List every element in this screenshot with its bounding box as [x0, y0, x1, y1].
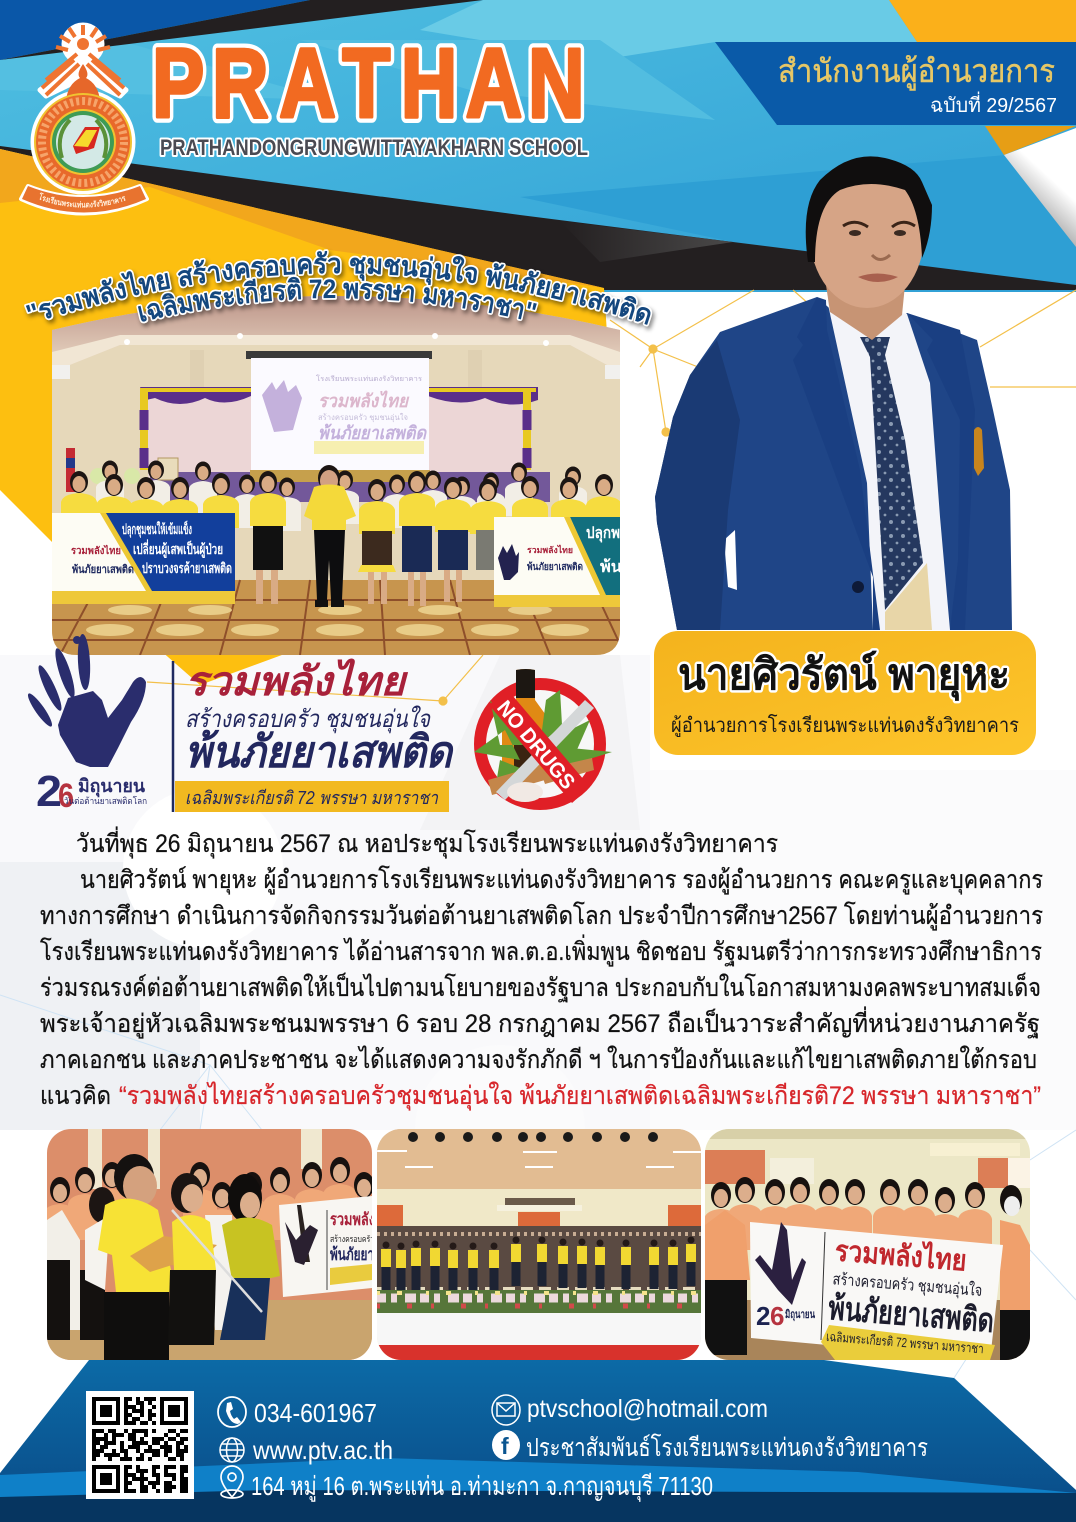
banner: รวมพลัง [330, 1210, 375, 1229]
facebook page: ประชาสัมพันธ์โรงเรียนพระแท่นดงรังวิทยาคาร [526, 1433, 928, 1462]
woman in yellow [168, 1173, 216, 1345]
banner: สร้างครอบครัว [330, 1234, 374, 1244]
school logo emblem [18, 22, 150, 216]
no drugs icon [474, 669, 612, 804]
curved headline: "รวมพลังไทย สร้างครอบครัว ชุมชนอุ่นใจ พ้นภัยยาเสพติด [24, 249, 657, 332]
photo: students with banner [704, 1129, 1030, 1360]
microphone stand [172, 1210, 262, 1312]
face features [843, 222, 915, 282]
speaker [98, 1154, 171, 1360]
front line in yellow [381, 1236, 696, 1292]
left banner: พ้นภัยยาเสพติด [72, 563, 134, 576]
campaign title: เฉลิมพระเกียรติ 72 พรรษา มหาราชา [185, 788, 439, 808]
prohibition band [489, 689, 590, 803]
phone number: 034-601967 [254, 1398, 377, 1428]
campaign title: สร้างครอบครัว ชุมชนอุ่นใจ [185, 705, 431, 734]
main event photo [52, 290, 625, 655]
lapels [793, 297, 880, 630]
issue number: ฉบับที่ 29/2567 [930, 91, 1057, 117]
folder [130, 1236, 217, 1272]
campaign hand icon: มิถุนายน [78, 776, 146, 798]
right banner: พ้น [600, 558, 622, 576]
campaign title [175, 658, 454, 812]
address: 164 หมู่ 16 ต.พระแท่น อ.ท่ามะกา จ.กาญจนบุรี 71130 [251, 1471, 713, 1502]
article body text: แนวคิด [40, 1082, 111, 1110]
students [705, 1177, 992, 1250]
principal name: นายศิวรัตน์ พายุหะ [678, 650, 1010, 702]
stage draping [150, 472, 550, 502]
bottle [502, 669, 548, 775]
sun fan [42, 25, 124, 95]
curtains [148, 393, 251, 480]
QR code [86, 1391, 194, 1499]
curved headline: เฉลิมพระเกียรติ 72 พรรษา มหาราชา" [136, 275, 543, 329]
ceiling [52, 296, 620, 352]
campaign hand icon [25, 634, 147, 816]
icon: globe [220, 1438, 244, 1462]
banner: สร้างครอบครัว ชุมชนอุ่นใจ [832, 1269, 983, 1301]
icon: email [492, 1395, 520, 1425]
flame [66, 64, 100, 100]
neck [826, 285, 905, 340]
icon: phone [218, 1397, 246, 1427]
main event photo: รวมพลังไทย [318, 390, 409, 411]
email address: ptvschool@hotmail.com [527, 1395, 768, 1423]
centre man [304, 465, 356, 607]
left banner: เปลี่ยนผู้เสพเป็นผู้ป่วย [133, 539, 223, 558]
main event photo: พ้นภัยยาเสพติด [318, 423, 427, 443]
photo: speaker reading statement [43, 1129, 381, 1360]
right banner: รวมพลังไทย [527, 544, 573, 555]
leaves [474, 690, 612, 790]
no drugs icon: NO DRUGS [492, 696, 579, 794]
icon: map pin [221, 1466, 243, 1498]
left banner: ปราบวงจรค้ายาเสพติด [142, 560, 232, 576]
projector screen [246, 351, 432, 359]
banner: มิถุนายน [785, 1308, 815, 1322]
school logo emblem: โรงเรียนพระแท่นดงรังวิทยาคาร [40, 192, 126, 208]
right banner: ปลุกพ [586, 525, 620, 543]
banner: พ้นภัยยาเสพติด [827, 1289, 995, 1339]
tie tag [885, 563, 932, 630]
header geometric background [0, 0, 1076, 685]
main event photo: โรงเรียนพระแท่นดงรังวิทยาคาร [316, 374, 422, 383]
banner: เฉลิมพระเกียรติ 72 พรรษา มหาราชา [826, 1329, 984, 1356]
banner [750, 1222, 1003, 1360]
photo: assembly hall [377, 1129, 701, 1360]
principal portrait [655, 156, 1012, 630]
left banner: ปลุกชุมชนให้เข้มแข็ง [122, 520, 192, 538]
footer band [0, 1360, 1076, 1522]
connector lines and dots [147, 290, 1076, 705]
PRATHAN wordmark: PRATHAN [152, 29, 585, 138]
banner: 6 [770, 1301, 784, 1331]
banner: รวมพลังไทย [834, 1233, 968, 1278]
date logo: 2 [36, 767, 62, 816]
cigarettes and syringe [488, 758, 594, 795]
seated crowd [377, 1226, 701, 1292]
article body text: พระเจ้าอยู่หัวเฉลิมพระชนมพรรษา 6 รอบ 28 กรกฎาคม 2567 ถือเป็นวาระสำคัญที่หน่วยงานภาครัฐ [40, 1006, 1040, 1039]
school name: PRATHANDONGRUNGWITTAYAKHARN SCHOOL [160, 135, 588, 160]
ribbon [22, 186, 146, 212]
banner: พ้นภัยยา [330, 1245, 374, 1264]
article body text [40, 826, 1043, 1111]
standing people with skirts [250, 471, 506, 606]
name plate [654, 631, 1036, 755]
article body text: วันที่พุธ 26 มิถุนายน 2567 ณ หอประชุมโรงเรียนพระแท่นดงรังวิทยาคาร [76, 826, 778, 859]
shirt [827, 300, 950, 630]
seal ring [34, 93, 132, 191]
campaign hand icon: วันต่อต้านยาเสพติดโลก [64, 796, 147, 806]
woman in chartreuse [220, 1174, 280, 1340]
banner [279, 1196, 375, 1297]
website: www.ptv.ac.th [252, 1435, 393, 1465]
suit [655, 297, 1012, 630]
banner: 2 [756, 1301, 770, 1331]
book [73, 127, 100, 154]
flag and flowers [66, 448, 75, 492]
campaign hand icon: 6 [58, 777, 74, 815]
tie [860, 337, 923, 610]
office title: สำนักงานผู้อำนวยการ [778, 53, 1055, 91]
office banner [715, 42, 1076, 125]
right banner [494, 517, 622, 607]
left banner: รวมพลังไทย [71, 544, 121, 557]
white halo [21, 23, 147, 214]
floor [52, 580, 620, 655]
head [810, 162, 924, 308]
badge [974, 427, 984, 476]
right banner: พ้นภัยยาเสพติด [527, 561, 583, 573]
left banner [52, 513, 235, 604]
campaign title: พ้นภัยยาเสพติด [185, 728, 454, 777]
principal title: ผู้อำนวยการโรงเรียนพระแท่นดงรังวิทยาคาร [671, 714, 1019, 738]
icon: facebook [492, 1430, 520, 1460]
main event photo: สร้างครอบครัว ชุมชนอุ่นใจ [318, 413, 408, 422]
icon: facebook: f [501, 1433, 509, 1459]
divider line [172, 661, 174, 812]
campaign title: รวมพลังไทย [185, 658, 409, 704]
front row left in yellow [61, 471, 622, 532]
PRATHAN wordmark: PRATHAN [152, 29, 585, 138]
back row of staff [96, 460, 587, 531]
